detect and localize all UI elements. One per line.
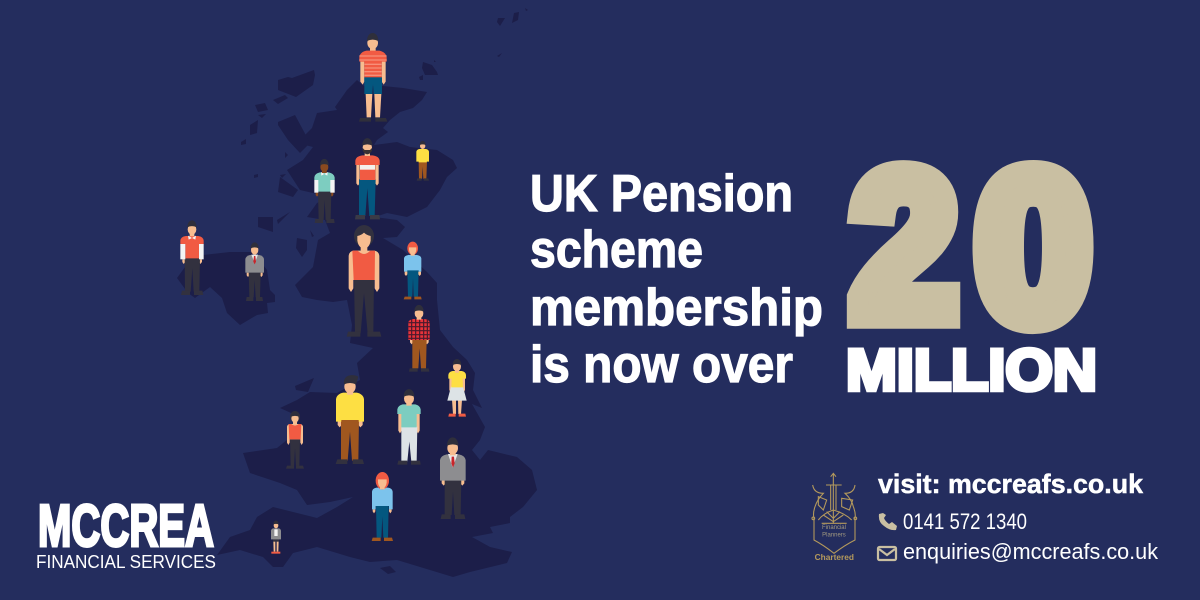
map: Northern Ireland — [177, 252, 275, 325]
logo: McCrea Financial Services: MCCREA — [38, 493, 214, 559]
big number 20 — [851, 129, 1090, 366]
big number 20: 2 — [851, 130, 957, 362]
heading: UK Pension scheme membership is now over — [530, 165, 823, 394]
word MILLION: MILLION — [846, 338, 1097, 403]
crest: Chartered Financial Planners: Planners — [822, 532, 846, 538]
heading: UK Pension scheme membership is now over: membership — [530, 279, 823, 337]
heading: UK Pension scheme membership is now over: scheme — [530, 221, 703, 279]
people, Scotland and Northern Ireland — [180, 33, 429, 337]
contact: email address: enquiries@mccreafs.co.uk — [903, 539, 1159, 564]
person: woman in red vest — [347, 225, 381, 337]
person: redhead in blue shirt — [404, 242, 422, 299]
person: red polo man — [180, 220, 204, 295]
person: man in yellow sweater — [336, 375, 364, 464]
icon: phone — [879, 513, 897, 530]
contact: website: visit: mccreafs.co.uk — [878, 469, 1144, 499]
crest: Chartered Financial Planners: Chartered — [815, 552, 854, 562]
logo: McCrea Financial Services: FINANCIAL SERVICES — [36, 551, 216, 572]
logo: McCrea Financial Services — [36, 493, 216, 572]
map: Scottish islands — [241, 8, 528, 574]
map of the UK — [177, 8, 537, 577]
heading: UK Pension scheme membership is now over: UK Pension — [530, 165, 793, 223]
person: tiny woman in grey jacket — [271, 521, 281, 554]
person: small man in grey suit — [245, 242, 264, 301]
person: teal polo man — [314, 159, 335, 223]
person: striped top and shorts — [359, 33, 387, 122]
person: girl in yellow top and skirt — [447, 359, 467, 417]
person: man in teal tee and light trousers — [397, 389, 421, 465]
person: small woman in red vest — [286, 411, 304, 469]
icon: envelope — [878, 547, 896, 560]
person: plaid shirt man — [408, 305, 430, 372]
map: Great Britain mainland — [217, 80, 537, 577]
person: bearded man — [355, 138, 380, 219]
heading: UK Pension scheme membership is now over: is now over — [530, 336, 793, 394]
contact: phone number: 0141 572 1340 — [903, 509, 1027, 534]
person: redheaded woman in blue shirt — [372, 472, 393, 541]
crest: Chartered Financial Planners — [812, 473, 857, 562]
crest: Chartered Financial Planners: Financial — [822, 525, 846, 531]
person: man in grey suit and red tie — [440, 437, 466, 519]
person: small man in yellow — [416, 141, 429, 181]
big number 20: 0 — [976, 129, 1090, 366]
people, England and Wales — [271, 305, 467, 554]
